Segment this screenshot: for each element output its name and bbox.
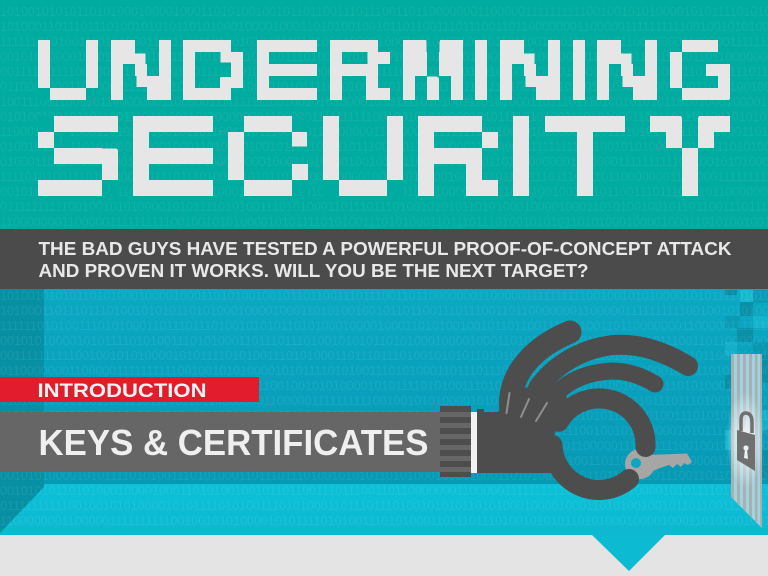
heading: introduction: INTRODUCTION [38, 380, 206, 402]
subtitle text: THE BAD GUYS HAVE TESTED A POWERFUL PROOF-OF-CONCEPT ATTACK [38, 238, 732, 259]
illustration: gloved arm and hand [440, 332, 688, 490]
title: Security: C [222, 91, 313, 221]
title: Undermining: M [397, 22, 469, 119]
left wall [0, 289, 44, 533]
title: Undermining: U [30, 22, 106, 119]
panel: red introduction label [0, 377, 259, 402]
thumb ring [552, 445, 629, 490]
panel: room scene [0, 289, 768, 536]
hand [477, 332, 688, 490]
panel: teal title background [0, 0, 768, 230]
title: Security: R [409, 91, 500, 221]
right wall mosaic [725, 290, 768, 478]
title: Undermining: I [469, 22, 492, 119]
title: Undermining [30, 22, 735, 119]
door glow [726, 392, 764, 488]
panel: bottom page strip with pointer [0, 535, 768, 576]
title: Security: T [542, 91, 628, 221]
ring finger [538, 345, 688, 388]
title: Undermining: I [567, 22, 590, 119]
middle finger [558, 371, 655, 392]
illustration: lock door [726, 354, 764, 528]
title: Security: S [33, 91, 124, 221]
little finger [510, 332, 570, 412]
binary pattern: title area [0, 5, 768, 229]
title: Security: E [122, 91, 220, 221]
title: Undermining: N [492, 22, 568, 119]
floor [0, 484, 768, 536]
icon: padlock [737, 413, 755, 471]
icon: key [625, 449, 692, 479]
key hole [631, 458, 641, 468]
knuckle lines [506, 393, 547, 421]
heading: keys and certificates: KEYS & CERTIFICATES [38, 422, 428, 463]
title: Security: U [313, 91, 413, 221]
title: Undermining: R [323, 22, 392, 119]
index finger ring [559, 398, 646, 447]
subtitle text [38, 238, 732, 281]
binary pattern: room [0, 289, 768, 528]
title: Undermining: E [249, 22, 322, 119]
title: Security: I [505, 91, 536, 221]
title: Undermining: D [176, 22, 248, 119]
title: Undermining: N [589, 22, 665, 119]
door stripes [731, 354, 762, 528]
title: Security: Y [649, 91, 731, 221]
title: Security [33, 91, 731, 221]
cuff [440, 406, 471, 477]
title: Undermining: G [666, 22, 735, 119]
panel: subtitle band [0, 229, 768, 289]
white wrist band [471, 412, 477, 473]
pointer notch [592, 535, 665, 571]
subtitle text: AND PROVEN IT WORKS. WILL YOU BE THE NEXT TARGET? [38, 260, 588, 281]
back wall [0, 289, 768, 485]
title: Undermining: N [103, 22, 179, 119]
panel: grey keys and certificates band [0, 412, 441, 472]
